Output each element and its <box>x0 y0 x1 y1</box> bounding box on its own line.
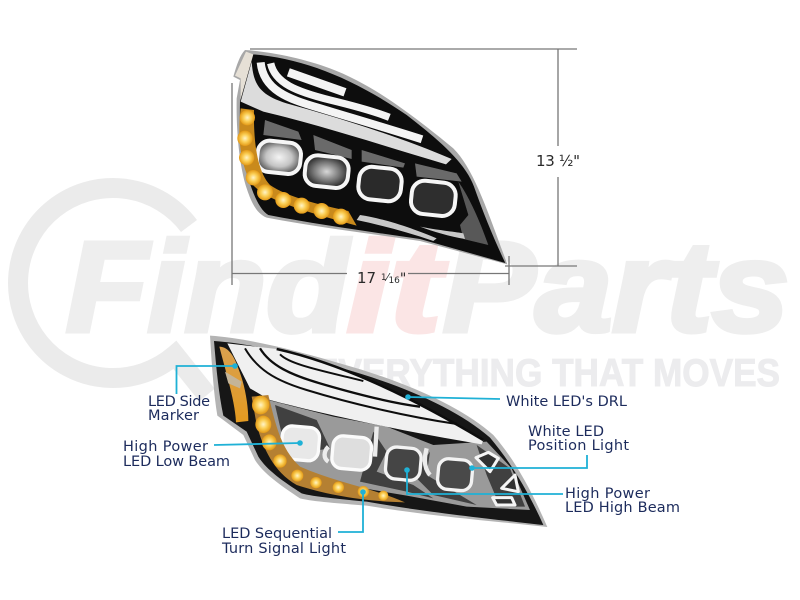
leader line <box>214 443 300 445</box>
leader dot <box>360 489 366 495</box>
chrome reflections between lenses <box>263 120 462 182</box>
dimension label 17 1/16: 17 <box>357 269 376 287</box>
label: Marker <box>148 408 199 424</box>
DRL chrome band <box>241 62 452 164</box>
outer rim <box>233 50 507 264</box>
leader dot <box>297 440 303 446</box>
width line right <box>408 272 509 274</box>
callout: low beam <box>123 439 303 470</box>
leader dot <box>405 394 411 400</box>
watermark ring <box>18 188 207 395</box>
lens ring 3 <box>357 166 403 202</box>
dimension label 17 1/16: " <box>400 271 406 287</box>
watermark word Parts: Parts <box>443 216 789 359</box>
watermark word it: it <box>347 216 446 359</box>
dimension label 17 1/16: 1 <box>381 273 387 283</box>
amber turn signal LEDs <box>237 108 357 226</box>
leader dot <box>469 465 475 471</box>
right tick <box>508 256 510 285</box>
dimension label 17 1/16: ⁄ <box>384 271 391 284</box>
callout: DRL <box>405 394 627 410</box>
lens ring 1 <box>256 139 302 175</box>
dimension label 13 1/2: 13 ½" <box>536 152 580 170</box>
top extension line <box>250 48 577 50</box>
high beam ring 1 <box>385 446 422 481</box>
top headlight photo <box>233 50 507 264</box>
low beam ring <box>280 425 320 462</box>
callout: position light <box>469 424 629 471</box>
vertical lower segment <box>557 177 559 266</box>
second low beam ring <box>331 435 372 471</box>
label: LED High Beam <box>565 500 680 516</box>
watermark logo <box>18 188 789 395</box>
amber side marker <box>219 347 248 422</box>
label: High Power <box>123 439 208 455</box>
callout: high beam <box>404 467 680 516</box>
DRL black separators <box>245 348 483 440</box>
lens ring 4 <box>410 179 457 217</box>
DRL white band <box>227 343 483 444</box>
callout: LED side marker <box>148 363 238 424</box>
dimension: height <box>250 49 577 266</box>
dimension label 17 1/16: 16 <box>388 276 400 286</box>
white position light segments <box>476 452 518 505</box>
leader line <box>407 470 563 494</box>
dark housing <box>240 54 505 263</box>
leader line <box>176 366 236 394</box>
leader line <box>338 492 363 532</box>
label: LED Sequential <box>222 526 332 542</box>
label: White LED's DRL <box>506 394 627 410</box>
label: High Power <box>565 486 650 502</box>
chrome reflector area <box>268 400 530 510</box>
chrome posts <box>325 427 430 475</box>
label: LED Side <box>148 394 210 410</box>
bottom extension line <box>505 265 577 267</box>
bottom headlight photo <box>210 336 547 527</box>
label: LED Low Beam <box>123 454 230 470</box>
dimension: width <box>232 83 509 285</box>
label: Position Light <box>528 438 629 454</box>
dark reflector shadows <box>275 405 525 507</box>
clear lens corner <box>235 52 257 98</box>
high beam ring 2 <box>437 458 473 491</box>
sequential amber LEDs <box>252 395 405 502</box>
watermark word Find: Find <box>66 216 351 359</box>
lens ring 2 <box>304 154 350 189</box>
callout: sequential turn signal <box>221 489 366 557</box>
label: Turn Signal Light <box>221 541 346 557</box>
DRL white strips <box>261 62 422 139</box>
lower chrome highlights <box>357 215 465 241</box>
dark housing <box>214 341 543 525</box>
width line left <box>232 272 347 274</box>
vertical upper segment <box>557 49 559 146</box>
leader dot <box>232 363 238 369</box>
leader line <box>472 455 587 468</box>
leader dot <box>404 467 410 473</box>
label: White LED <box>528 424 604 440</box>
outer rim <box>210 336 547 527</box>
leader line <box>408 397 500 399</box>
left tick <box>231 83 233 285</box>
